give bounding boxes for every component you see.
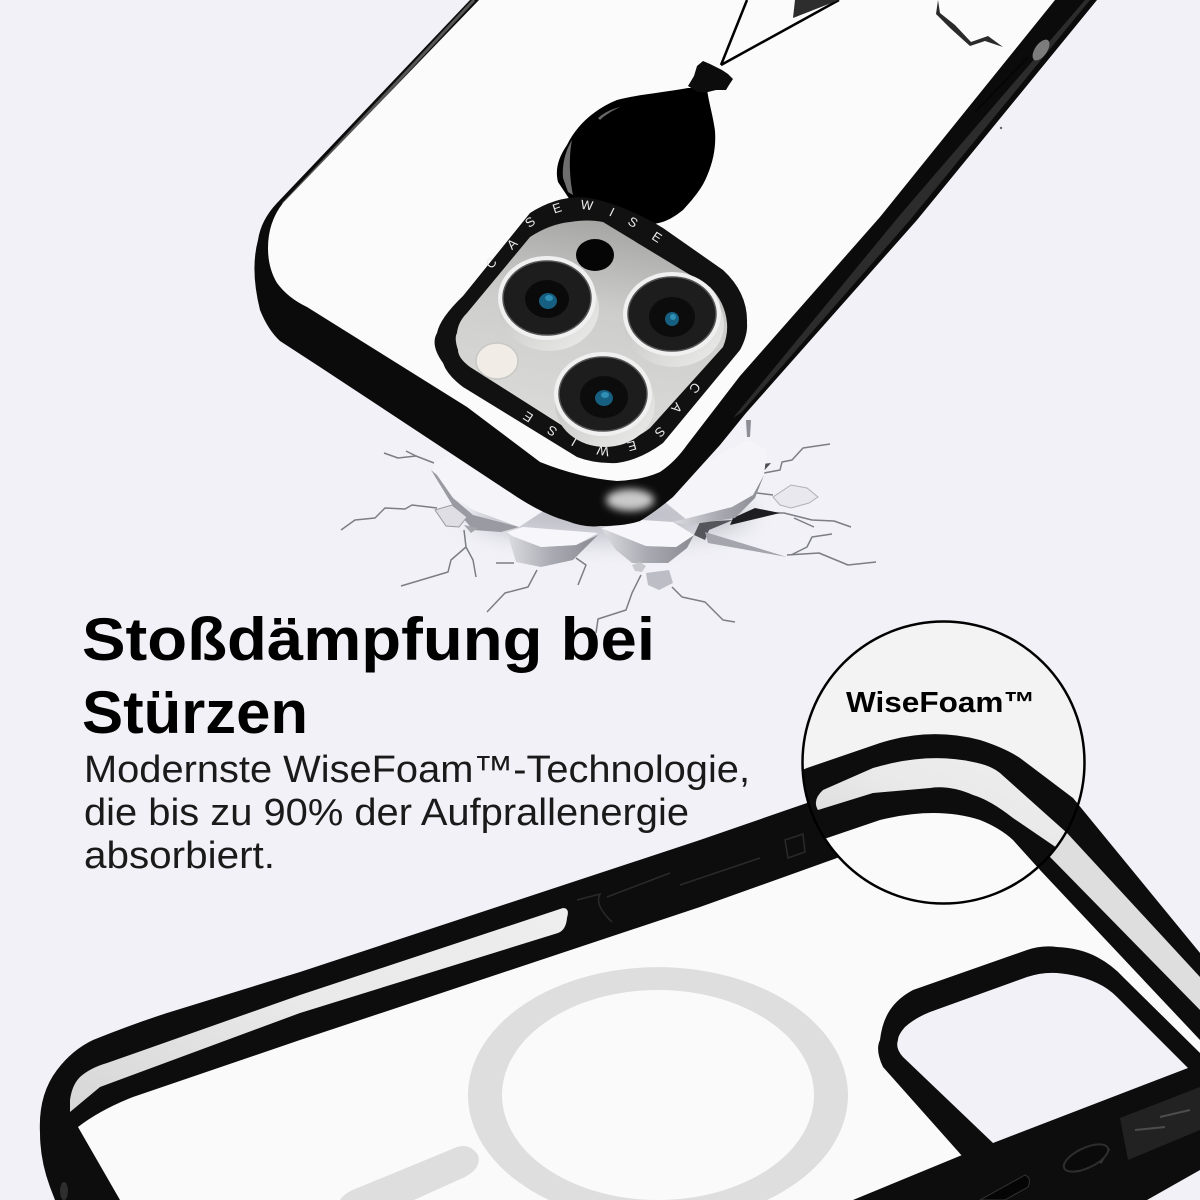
- ring brand text: S: [625, 213, 641, 231]
- ring brand text: C: [482, 255, 500, 272]
- camera cutout frame: [878, 946, 1200, 1157]
- ring brand text: S: [522, 213, 538, 231]
- strings: [721, 0, 747, 65]
- heading: Stürzen: [82, 679, 308, 746]
- balloon highlight: [563, 140, 573, 195]
- body text: Modernste WiseFoam™-Technologie,: [84, 749, 750, 791]
- debris chunk bottom left: [507, 527, 598, 567]
- dark crack wedges: [730, 508, 780, 525]
- ring brand text: A: [668, 400, 685, 416]
- ring brand text: E: [626, 438, 638, 454]
- outer black frame: [40, 770, 1200, 1200]
- kite tail: [793, 0, 839, 18]
- ring brand text: W: [580, 197, 595, 213]
- small debris pieces: [435, 485, 818, 590]
- bottom phone case: [40, 770, 1200, 1200]
- lens top left: [498, 256, 599, 351]
- body text: die bis zu 90% der Aufprallenergie: [84, 792, 689, 834]
- impact shadow: [470, 489, 750, 541]
- lidar sensor: [576, 239, 614, 271]
- side button details: [975, 37, 1053, 129]
- crack lines: [341, 444, 876, 633]
- ring brand text: C: [686, 380, 704, 396]
- left translucent strip: [70, 908, 568, 1112]
- flash: [476, 343, 518, 379]
- black bumper: [254, 0, 1097, 526]
- clear back panel: [78, 815, 1200, 1200]
- balloon artwork: [557, 0, 1003, 228]
- lens top right: [623, 272, 724, 367]
- top phone in case: [254, 0, 1097, 526]
- camera ring: [435, 197, 747, 463]
- corner highlight: [606, 489, 654, 511]
- debris chunk left large: [431, 445, 560, 532]
- ring brand text: S: [544, 422, 560, 440]
- balloon knot: [688, 61, 733, 92]
- ring brand text: E: [551, 199, 564, 217]
- lower edge details: [60, 1087, 1200, 1200]
- ring brand text: I: [607, 205, 617, 220]
- body text: [84, 749, 750, 877]
- ground impact cracks: [341, 420, 876, 633]
- bumper gloss right: [733, 0, 1090, 418]
- ring brand text: I: [569, 435, 579, 449]
- squiggle: [936, 0, 1003, 47]
- camera plate: [456, 220, 727, 443]
- ring brand text: E: [520, 408, 536, 426]
- magsafe ring: [468, 967, 848, 1200]
- magnifier outline: [802, 622, 1084, 904]
- heading: [82, 606, 655, 746]
- camera module: [435, 197, 747, 463]
- side buttons: [577, 834, 805, 922]
- debris chunk right large: [650, 440, 767, 525]
- ring brand text: S: [651, 424, 668, 441]
- magnifier callout: WiseFoam: [801, 620, 1086, 905]
- ring brand text: A: [504, 235, 521, 252]
- heading: Stoßdämpfung bei: [82, 606, 655, 673]
- magsafe alignment bar: [340, 1146, 479, 1200]
- magnified frame: [804, 734, 1078, 866]
- body text: absorbiert.: [84, 835, 275, 877]
- lens bottom: [554, 352, 655, 447]
- ring brand text: [482, 197, 704, 459]
- white back panel: [268, 0, 1055, 481]
- balloon body: [557, 88, 715, 228]
- ring brand text: E: [649, 228, 665, 246]
- magnifier label: WiseFoam™: [846, 687, 1035, 719]
- right translucent strip: [1040, 833, 1200, 1010]
- debris chunk bottom right: [601, 520, 694, 563]
- ring brand text: W: [595, 442, 610, 459]
- camera cutout opening: [897, 973, 1188, 1143]
- magnifier background: [802, 622, 1084, 904]
- bumper gloss left edge: [283, 0, 474, 204]
